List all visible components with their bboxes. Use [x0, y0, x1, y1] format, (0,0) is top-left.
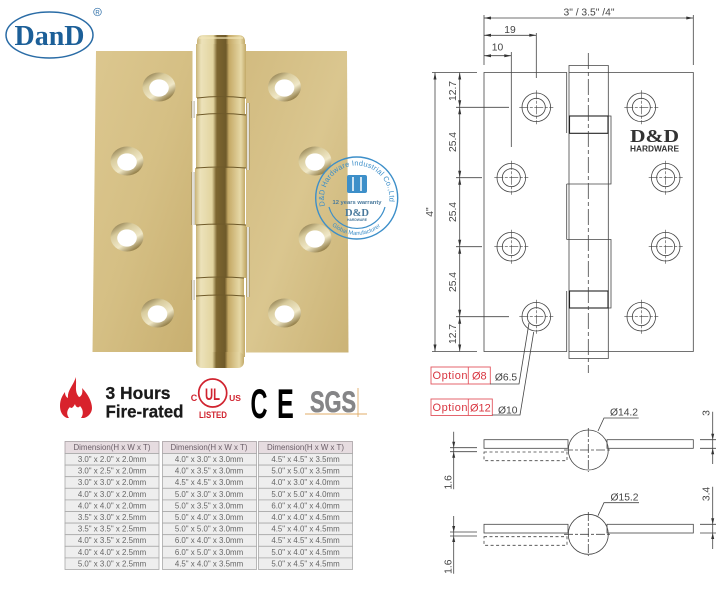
left leaf [92, 51, 192, 352]
dimension table: column 3: 6.0" x 4.0" x 4.0mm [271, 501, 340, 510]
hinge photo [92, 35, 348, 368]
dimension table: column 1: 3.0" x 2.5" x 2.0mm [78, 467, 147, 476]
dimension table: column 3: 4.5" x 4.5" x 3.5mm [271, 455, 340, 464]
section view: 15.2: 1.6 [443, 559, 454, 574]
option callout: 8 mm: Ø8 [472, 370, 487, 382]
dimension table: column 1: 4.0" x 4.0" x 2.5mm [78, 548, 147, 557]
dimension table: column 1: 3.5" x 3.5" x 2.5mm [78, 525, 147, 534]
dimension table: column 3: 4.0" x 3.0" x 4.0mm [271, 478, 340, 487]
warranty stamp: HARDWARE [347, 218, 368, 222]
dimension table: column 2: 4.5" x 4.0" x 3.5mm [175, 559, 244, 568]
drawn brand mark: HARDWARE [630, 144, 679, 154]
option callout: 12 mm: Ø12 [470, 402, 491, 414]
icon: flame [60, 377, 92, 418]
section view: 14.2 [443, 408, 716, 489]
logo: DanD: R [95, 10, 100, 16]
dimension table: column 2 [162, 442, 256, 570]
dimension table: column 2: 4.0" x 3.0" x 3.0mm [175, 455, 244, 464]
dimension table: column 3: 4.5" x 4.5" x 4.5mm [271, 536, 340, 545]
fire rating text: Fire-rated [106, 402, 184, 422]
option callout: 8 mm [431, 323, 529, 384]
UL listed mark: UL [205, 385, 220, 404]
dimension table: column 1: 4.0" x 4.0" x 2.0mm [78, 501, 147, 510]
section view: 15.2: 3.4 [702, 487, 713, 501]
warranty stamp [315, 156, 398, 240]
dimension table: column 2: 4.0" x 3.5" x 3.0mm [175, 467, 244, 476]
dimension table: column 3: 5.0" x 4.5" x 4.5mm [271, 559, 340, 568]
width dimensions: 3" / 3.5" /4" [563, 8, 615, 19]
dimension table: column 2: 6.0" x 5.0" x 3.0mm [175, 548, 244, 557]
dimension table: column 2: 5.0" x 3.5" x 3.0mm [175, 501, 244, 510]
UL listed mark [191, 379, 241, 420]
section view: 15.2 [443, 487, 716, 574]
warranty stamp: Global Manufacturer [332, 223, 380, 236]
height dimensions: 25.4 [448, 202, 459, 222]
drawn brand mark: D&D [630, 126, 679, 146]
dimension table: column 1: 3.5" x 3.0" x 2.5mm [78, 513, 147, 522]
UL listed mark: US [229, 393, 241, 403]
dimension table: column 3: Dimension(H x W x T) [267, 443, 344, 452]
right leaf [246, 51, 348, 352]
CE mark: E [277, 382, 294, 428]
hinge plate outline [484, 66, 693, 358]
CE mark [250, 381, 294, 428]
width dimensions [484, 8, 693, 147]
dimension table: column 3: 5.0" x 5.0" x 4.0mm [271, 490, 340, 499]
UL listed mark: LISTED [199, 410, 227, 420]
dimension table: column 3: 4.5" x 4.0" x 4.5mm [271, 525, 340, 534]
dimension table: column 2: 5.0" x 4.0" x 3.0mm [175, 513, 244, 522]
knuckle gaps [193, 101, 248, 300]
option callout: 12 mm: Ø10 [498, 405, 518, 416]
section view: 15.2: Ø15.2 [610, 492, 639, 503]
dimension table: column 3: 5.0" x 4.0" x 4.5mm [271, 548, 340, 557]
dimension table: column 2: 5.0" x 3.0" x 3.0mm [175, 490, 244, 499]
height dimensions: 25.4 [448, 272, 459, 292]
option callout: 12 mm [431, 332, 534, 416]
dimension table: column 1: Dimension(H x W x T) [73, 443, 151, 452]
option callout: 12 mm: Option [432, 402, 468, 414]
UL listed mark: C [191, 393, 198, 403]
dimension table: column 1: 5.0" x 3.0" x 2.5mm [78, 559, 147, 568]
fire rating text: 3 Hours [106, 383, 171, 403]
warranty stamp: D&D [345, 208, 369, 219]
hinge barrel [195, 35, 246, 368]
section view: 14.2: 3 [702, 410, 713, 416]
drawn brand mark [630, 126, 679, 154]
fire rating text [106, 383, 184, 422]
dimension table: column 3: 5.0" x 5.0" x 3.5mm [271, 467, 340, 476]
drawn screw holes [494, 90, 683, 334]
dimension table: column 1: 4.0" x 3.5" x 2.5mm [78, 536, 147, 545]
width dimensions: 10 [492, 42, 503, 53]
dimension table: column 2: 6.0" x 4.0" x 3.0mm [175, 536, 244, 545]
option callout: 8 mm: Ø6.5 [495, 373, 517, 384]
screw holes [110, 72, 332, 328]
warranty stamp: 12 years warranty [332, 200, 382, 206]
dimension table: column 2: 4.5" x 4.5" x 3.0mm [175, 478, 244, 487]
dimension table: column 1: 4.0" x 3.0" x 2.0mm [78, 490, 147, 499]
height dimensions: 12.7 [448, 81, 459, 101]
height dimensions: 25.4 [448, 132, 459, 152]
knuckle details [567, 53, 611, 373]
option callout: 8 mm: Option [432, 370, 468, 382]
dimension table: column 2: Dimension(H x W x T) [170, 443, 248, 452]
dimension table: column 1: 3.0" x 2.0" x 2.0mm [78, 455, 147, 464]
dimension table: column 1: 3.0" x 3.0" x 2.0mm [78, 478, 147, 487]
height dimensions: 4" [425, 207, 436, 217]
CE mark: C [250, 381, 267, 428]
SGS mark: SGS [310, 386, 356, 419]
section view: 14.2: Ø14.2 [610, 408, 638, 419]
dimension table: column 3: 4.0" x 4.0" x 4.5mm [271, 513, 340, 522]
dimension table: column 3 [258, 442, 352, 570]
technical drawing: front view [425, 8, 693, 373]
height dimensions: 12.7 [448, 324, 459, 344]
height dimensions [425, 72, 509, 352]
width dimensions: 19 [504, 25, 516, 36]
dimension table: column 1 [65, 442, 159, 570]
logo: DanD: DanD [14, 20, 84, 52]
dimension table: column 2: 5.0" x 5.0" x 3.0mm [175, 525, 244, 534]
section view: 14.2: 1.6 [443, 475, 454, 489]
warranty stamp: D&D Hardware Industrial Co.,Ltd [318, 160, 395, 206]
logo: DanD [6, 8, 101, 58]
